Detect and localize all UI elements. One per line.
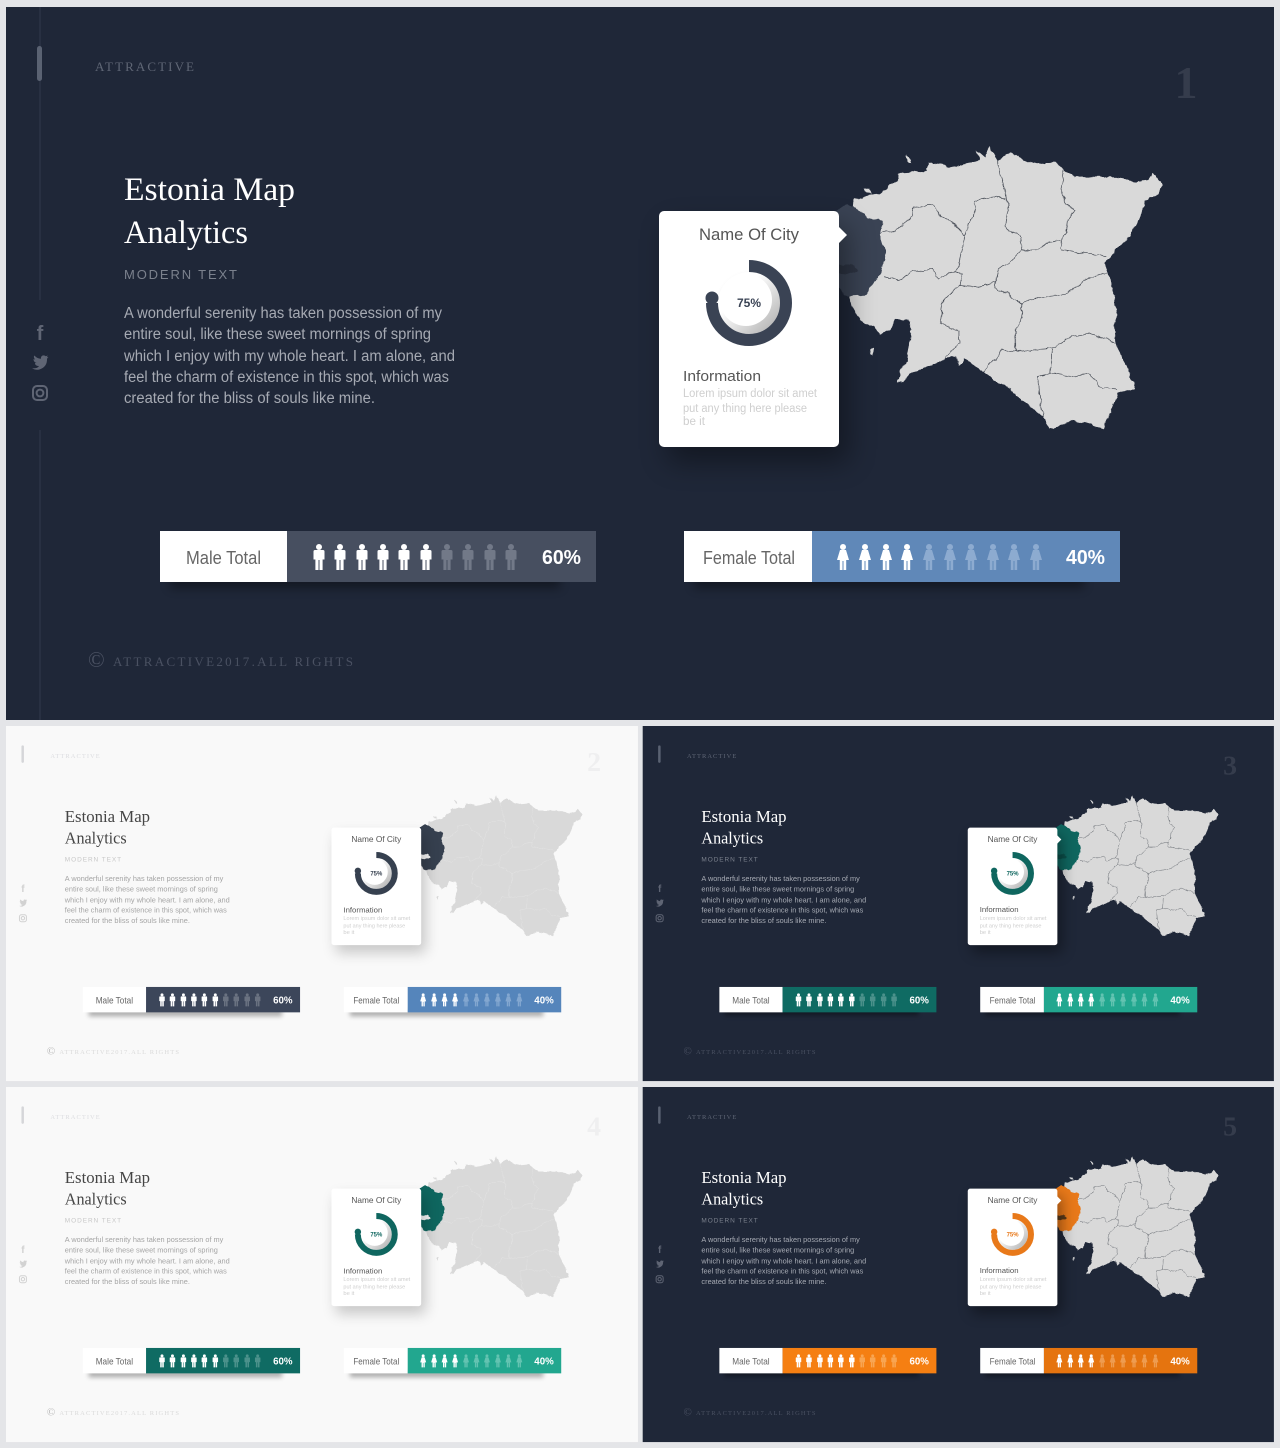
- info card: Name Of City: [351, 1195, 402, 1205]
- body text: entire soul, like these sweet mornings of spring: [65, 884, 218, 893]
- slide number: 3: [1223, 750, 1237, 781]
- info card: [331, 1189, 426, 1314]
- footer copyright: [47, 1407, 179, 1419]
- brand label: ATTRACTIVE: [95, 59, 194, 74]
- info card: put any thing here please: [343, 924, 405, 930]
- side rail with scroll marker: [37, 7, 42, 720]
- body text: [64, 1235, 230, 1286]
- body text: A wonderful serenity has taken possession of my: [65, 1235, 223, 1244]
- male total bar: [160, 531, 596, 588]
- info card: [659, 211, 848, 462]
- map of Estonia: [418, 1157, 582, 1297]
- title: Estonia Map: [124, 172, 295, 208]
- title: Analytics: [124, 215, 248, 251]
- footer copyright: ATTRACTIVE2017.ALL RIGHTS: [59, 1410, 179, 1417]
- info card: Lorem ipsum dolor sit amet: [343, 1277, 411, 1283]
- social icons: [19, 1245, 27, 1283]
- social icons: f: [21, 884, 25, 895]
- info card: [968, 1189, 1062, 1314]
- social icons: f: [21, 1245, 25, 1256]
- male total bar: [83, 1348, 300, 1377]
- social icons: [32, 323, 48, 400]
- male total bar: 60%: [273, 1356, 293, 1367]
- male total bar: Male Total: [732, 1356, 770, 1366]
- body text: feel the charm of existence in this spot, which was: [65, 906, 227, 915]
- female total bar: [980, 987, 1197, 1015]
- body text: which I enjoy with my whole heart. I am alone, and: [700, 895, 866, 904]
- male total bar: [83, 987, 300, 1016]
- info card: Lorem ipsum dolor sit amet: [980, 1277, 1047, 1283]
- footer copyright: ©: [47, 1046, 55, 1058]
- body text: A wonderful serenity has taken possession of my: [701, 1235, 860, 1244]
- social icons: f: [658, 1245, 662, 1256]
- subtitle: MODERN TEXT: [124, 267, 237, 282]
- title: [701, 807, 787, 848]
- info card: be it: [343, 930, 355, 936]
- female total bar: 40%: [1170, 995, 1190, 1006]
- body text: feel the charm of existence in this spot, which was: [65, 1267, 227, 1276]
- donut chart 75%: [706, 266, 786, 340]
- info card: Lorem ipsum dolor sit amet: [343, 916, 411, 922]
- body text: which I enjoy with my whole heart. I am alone, and: [64, 1256, 230, 1265]
- info card: Name Of City: [351, 834, 402, 844]
- title: Estonia Map: [65, 1168, 150, 1187]
- male total bar: 60%: [542, 547, 581, 569]
- subtitle: MODERN TEXT: [701, 856, 758, 863]
- subtitle: MODERN TEXT: [65, 1217, 121, 1224]
- footer copyright: [47, 1046, 179, 1058]
- info card: [331, 828, 426, 953]
- info card: Lorem ipsum dolor sit amet: [980, 916, 1047, 922]
- title: Estonia Map: [701, 1168, 787, 1187]
- body text: which I enjoy with my whole heart. I am alone, and: [64, 895, 230, 904]
- title: Analytics: [65, 829, 127, 848]
- info card: put any thing here please: [683, 403, 807, 415]
- body text: created for the bliss of souls like mine.: [65, 1277, 190, 1286]
- side marker: [658, 745, 661, 763]
- brand label: ATTRACTIVE: [50, 1114, 100, 1121]
- brand label: ATTRACTIVE: [687, 753, 736, 760]
- info card: put any thing here please: [343, 1285, 405, 1291]
- body text: which I enjoy with my whole heart. I am alone, and: [123, 348, 455, 365]
- male total bar: Male Total: [96, 995, 133, 1005]
- footer copyright: ATTRACTIVE2017.ALL RIGHTS: [696, 1049, 816, 1056]
- donut chart 75%: 75%: [370, 1232, 383, 1238]
- social icons: f: [37, 323, 44, 345]
- panel: slide 1 large navy: [6, 7, 1274, 720]
- female total bar: 40%: [534, 995, 554, 1006]
- info card: Name Of City: [699, 225, 799, 244]
- info card: put any thing here please: [980, 924, 1041, 930]
- social icons: [656, 1245, 664, 1283]
- map of Estonia: [1054, 796, 1218, 936]
- donut chart 75%: 75%: [370, 871, 383, 877]
- info card: Name Of City: [988, 834, 1038, 844]
- panel: slide 4 light teal: [6, 1087, 638, 1442]
- title: Estonia Map: [65, 807, 150, 826]
- male total bar: [719, 987, 936, 1015]
- female total bar: [344, 987, 561, 1016]
- brand label: ATTRACTIVE: [50, 753, 100, 760]
- social icons: f: [658, 884, 662, 895]
- footer copyright: ATTRACTIVE2017.ALL RIGHTS: [696, 1410, 816, 1417]
- map of Estonia: [833, 147, 1162, 429]
- body text: entire soul, like these sweet mornings of spring: [701, 884, 854, 893]
- footer copyright: ATTRACTIVE2017.ALL RIGHTS: [113, 654, 353, 669]
- body text: A wonderful serenity has taken possession of my: [124, 305, 442, 322]
- body text: created for the bliss of souls like mine.: [701, 1277, 826, 1286]
- side marker: [21, 1106, 24, 1124]
- male total bar: 60%: [273, 995, 293, 1006]
- donut chart 75%: 75%: [1007, 871, 1019, 877]
- female total bar: Female Total: [353, 995, 399, 1005]
- body text: created for the bliss of souls like mine.: [701, 916, 826, 925]
- body text: [64, 874, 230, 925]
- title: [65, 807, 150, 848]
- body text: feel the charm of existence in this spot, which was: [701, 1267, 863, 1276]
- title: [701, 1168, 787, 1209]
- info card: put any thing here please: [980, 1285, 1041, 1291]
- footer copyright: ©: [88, 647, 105, 672]
- body text: created for the bliss of souls like mine.: [65, 916, 190, 925]
- male total bar: 60%: [910, 1356, 929, 1367]
- female total bar: 40%: [534, 1356, 554, 1367]
- footer copyright: [684, 1407, 816, 1419]
- title: Analytics: [701, 829, 763, 848]
- info card: [968, 828, 1062, 953]
- female total bar: 40%: [1170, 1356, 1190, 1367]
- body text: entire soul, like these sweet mornings of spring: [65, 1245, 218, 1254]
- info card: be it: [683, 416, 706, 428]
- body text: A wonderful serenity has taken possession of my: [701, 874, 860, 883]
- body text: [123, 305, 455, 407]
- info card: Lorem ipsum dolor sit amet: [683, 388, 818, 400]
- title: [124, 172, 295, 251]
- body text: feel the charm of existence in this spot, which was: [701, 906, 863, 915]
- info card: Information: [343, 905, 382, 914]
- social icons: [656, 884, 664, 922]
- male total bar: [719, 1348, 936, 1376]
- male total bar: Male Total: [186, 548, 261, 568]
- title: Analytics: [701, 1190, 763, 1209]
- footer copyright: [88, 647, 353, 672]
- female total bar: Female Total: [703, 548, 795, 568]
- male total bar: Male Total: [732, 995, 770, 1005]
- female total bar: Female Total: [990, 995, 1035, 1005]
- body text: [700, 874, 866, 925]
- info card: be it: [343, 1291, 355, 1297]
- title: Estonia Map: [701, 807, 787, 826]
- map of Estonia: [1054, 1157, 1218, 1297]
- female total bar: [684, 531, 1120, 588]
- footer copyright: ©: [684, 1407, 692, 1419]
- social icons: [19, 884, 27, 922]
- side marker: [658, 1106, 661, 1124]
- female total bar: [980, 1348, 1197, 1376]
- title: [65, 1168, 150, 1209]
- body text: [700, 1235, 866, 1286]
- footer copyright: ©: [47, 1407, 55, 1419]
- female total bar: Female Total: [990, 1356, 1035, 1366]
- donut chart 75%: 75%: [1007, 1232, 1019, 1238]
- subtitle: MODERN TEXT: [65, 856, 121, 863]
- info card: be it: [980, 930, 991, 936]
- slide number: 5: [1223, 1111, 1237, 1142]
- side marker: [21, 745, 24, 763]
- footer copyright: [684, 1046, 816, 1058]
- body text: feel the charm of existence in this spot, which was: [124, 369, 449, 386]
- body text: created for the bliss of souls like mine.: [124, 390, 375, 407]
- female total bar: 40%: [1066, 547, 1105, 569]
- panel: slide 5 dark orange: [643, 1087, 1274, 1442]
- body text: which I enjoy with my whole heart. I am alone, and: [700, 1256, 866, 1265]
- brand label: ATTRACTIVE: [687, 1114, 736, 1121]
- male total bar: 60%: [910, 995, 929, 1006]
- map of Estonia: [418, 796, 582, 936]
- slide number: 4: [587, 1111, 601, 1142]
- slide number: 1: [1174, 57, 1198, 108]
- footer copyright: ©: [684, 1046, 692, 1058]
- info card: be it: [980, 1291, 991, 1297]
- panel: slide 3 dark teal: [643, 726, 1274, 1081]
- female total bar: [344, 1348, 561, 1377]
- info card: Information: [980, 905, 1019, 914]
- slide number: 2: [587, 747, 601, 778]
- info card: Information: [683, 368, 761, 385]
- title: Analytics: [65, 1190, 127, 1209]
- body text: entire soul, like these sweet mornings of spring: [124, 326, 431, 343]
- female total bar: Female Total: [353, 1356, 399, 1366]
- male total bar: Male Total: [96, 1356, 133, 1366]
- panel: slide 2 light navy: [6, 726, 638, 1081]
- footer copyright: ATTRACTIVE2017.ALL RIGHTS: [59, 1049, 179, 1056]
- body text: entire soul, like these sweet mornings of spring: [701, 1245, 854, 1254]
- info card: Information: [343, 1266, 382, 1275]
- body text: A wonderful serenity has taken possession of my: [65, 874, 223, 883]
- info card: Information: [980, 1266, 1019, 1275]
- info card: Name Of City: [988, 1195, 1038, 1205]
- subtitle: MODERN TEXT: [701, 1217, 758, 1224]
- donut chart 75%: 75%: [737, 296, 761, 310]
